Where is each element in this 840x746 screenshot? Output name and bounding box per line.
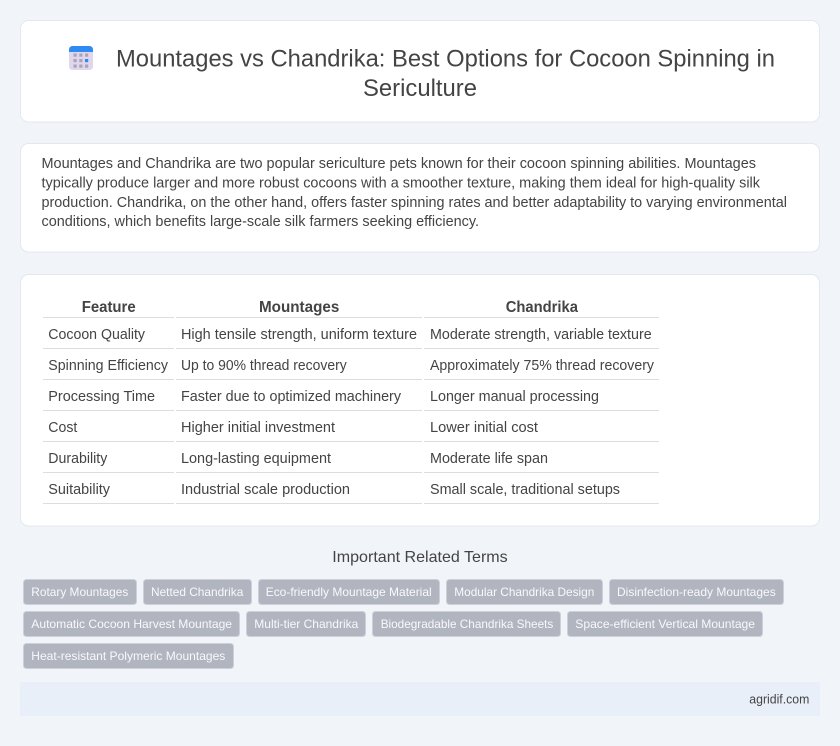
row: suitability: Small scale, traditional setups	[430, 482, 620, 498]
text block: introduction paragraph: typically produce larger and more robust cocoons with a smoother texture, making them ideal for high-quality silk	[42, 176, 761, 192]
row: cocoon quality	[48, 327, 652, 343]
row: spinning efficiency: Up to 90% thread recovery	[181, 358, 347, 374]
table header row	[82, 299, 578, 316]
row: cost: Cost	[48, 420, 77, 436]
row: processing time: Longer manual processing	[430, 389, 599, 405]
panel: introduction	[20, 144, 820, 252]
tag: Biodegradable Chandrika Sheets	[372, 612, 560, 636]
row: suitability	[48, 482, 620, 498]
row: durability	[48, 451, 548, 467]
row: durability: Moderate life span	[430, 451, 548, 467]
tag: Netted Chandrika: Netted Chandrika	[151, 585, 244, 599]
tag: Biodegradable Chandrika Sheets: Biodegradable Chandrika Sheets	[381, 617, 553, 631]
row: cost: Lower initial cost	[430, 420, 538, 436]
tag: Rotary Mountages: Rotary Mountages	[31, 585, 128, 599]
tag: Multi-tier Chandrika: Multi-tier Chandrika	[254, 617, 359, 631]
row: processing time: Faster due to optimized machinery	[181, 389, 402, 405]
row: processing time	[48, 389, 599, 405]
row: cost	[48, 420, 538, 436]
row: spinning efficiency	[48, 358, 655, 374]
tag: Space-efficient Vertical Mountage: Space-efficient Vertical Mountage	[575, 617, 755, 631]
tag: Multi-tier Chandrika	[246, 612, 366, 636]
heading: important related terms: Important Related Terms	[332, 549, 508, 566]
table header row: Feature	[82, 299, 136, 316]
tag: Heat-resistant Polymeric Mountages	[24, 644, 234, 668]
tag: Disinfection-ready Mountages	[610, 580, 784, 604]
tag: Disinfection-ready Mountages: Disinfection-ready Mountages	[617, 585, 776, 599]
tag: Rotary Mountages	[24, 580, 136, 604]
row: cocoon quality: Moderate strength, variable texture	[430, 327, 652, 343]
tag: Modular Chandrika Design	[446, 580, 602, 604]
table header row: Chandrika	[506, 299, 578, 316]
panel: title header	[20, 20, 820, 122]
table header row: Mountages	[259, 299, 339, 316]
tag: Netted Chandrika	[144, 580, 252, 604]
row: suitability: Industrial scale production	[181, 482, 350, 498]
title: Sericulture	[363, 75, 477, 102]
row: cocoon quality: Cocoon Quality	[48, 327, 146, 343]
icon: calendar	[69, 46, 93, 70]
tag: Heat-resistant Polymeric Mountages: Heat-resistant Polymeric Mountages	[31, 649, 225, 663]
tag: Automatic Cocoon Harvest Mountage: Automatic Cocoon Harvest Mountage	[31, 617, 232, 631]
text block: introduction paragraph	[42, 156, 787, 230]
row: spinning efficiency: Spinning Efficiency	[48, 358, 169, 374]
text block: introduction paragraph: Mountages and Chandrika are two popular sericulture pets known for their cocoon spinning abilities. Mountages	[42, 156, 756, 172]
tag: Eco-friendly Mountage Material: Eco-friendly Mountage Material	[266, 585, 432, 599]
row: suitability: Suitability	[48, 482, 111, 498]
row: durability: Long-lasting equipment	[181, 451, 331, 467]
title	[116, 46, 775, 102]
footer bar	[20, 682, 820, 716]
text block: introduction paragraph: production. Chandrika, on the other hand, offers faster spinning rates and better adaptability to varying environmental	[42, 195, 787, 211]
footer source text: agridif.com	[749, 691, 809, 706]
row: processing time: Processing Time	[48, 389, 155, 405]
title: Mountages vs Chandrika: Best Options for Cocoon Spinning in	[116, 46, 775, 72]
tag: Modular Chandrika Design: Modular Chandrika Design	[454, 585, 594, 599]
row: spinning efficiency: Approximately 75% thread recovery	[430, 358, 655, 374]
row: cocoon quality: High tensile strength, uniform texture	[181, 327, 417, 343]
panel: comparison table	[20, 274, 820, 526]
related term tags	[24, 580, 784, 668]
tag: Eco-friendly Mountage Material	[258, 580, 440, 604]
text block: introduction paragraph: conditions, which benefits large-scale silk farmers seeking efficiency.	[42, 214, 479, 230]
tag: Automatic Cocoon Harvest Mountage	[24, 612, 240, 636]
row: cost: Higher initial investment	[181, 420, 335, 436]
row: durability: Durability	[48, 451, 108, 467]
tag: Space-efficient Vertical Mountage	[568, 612, 762, 636]
